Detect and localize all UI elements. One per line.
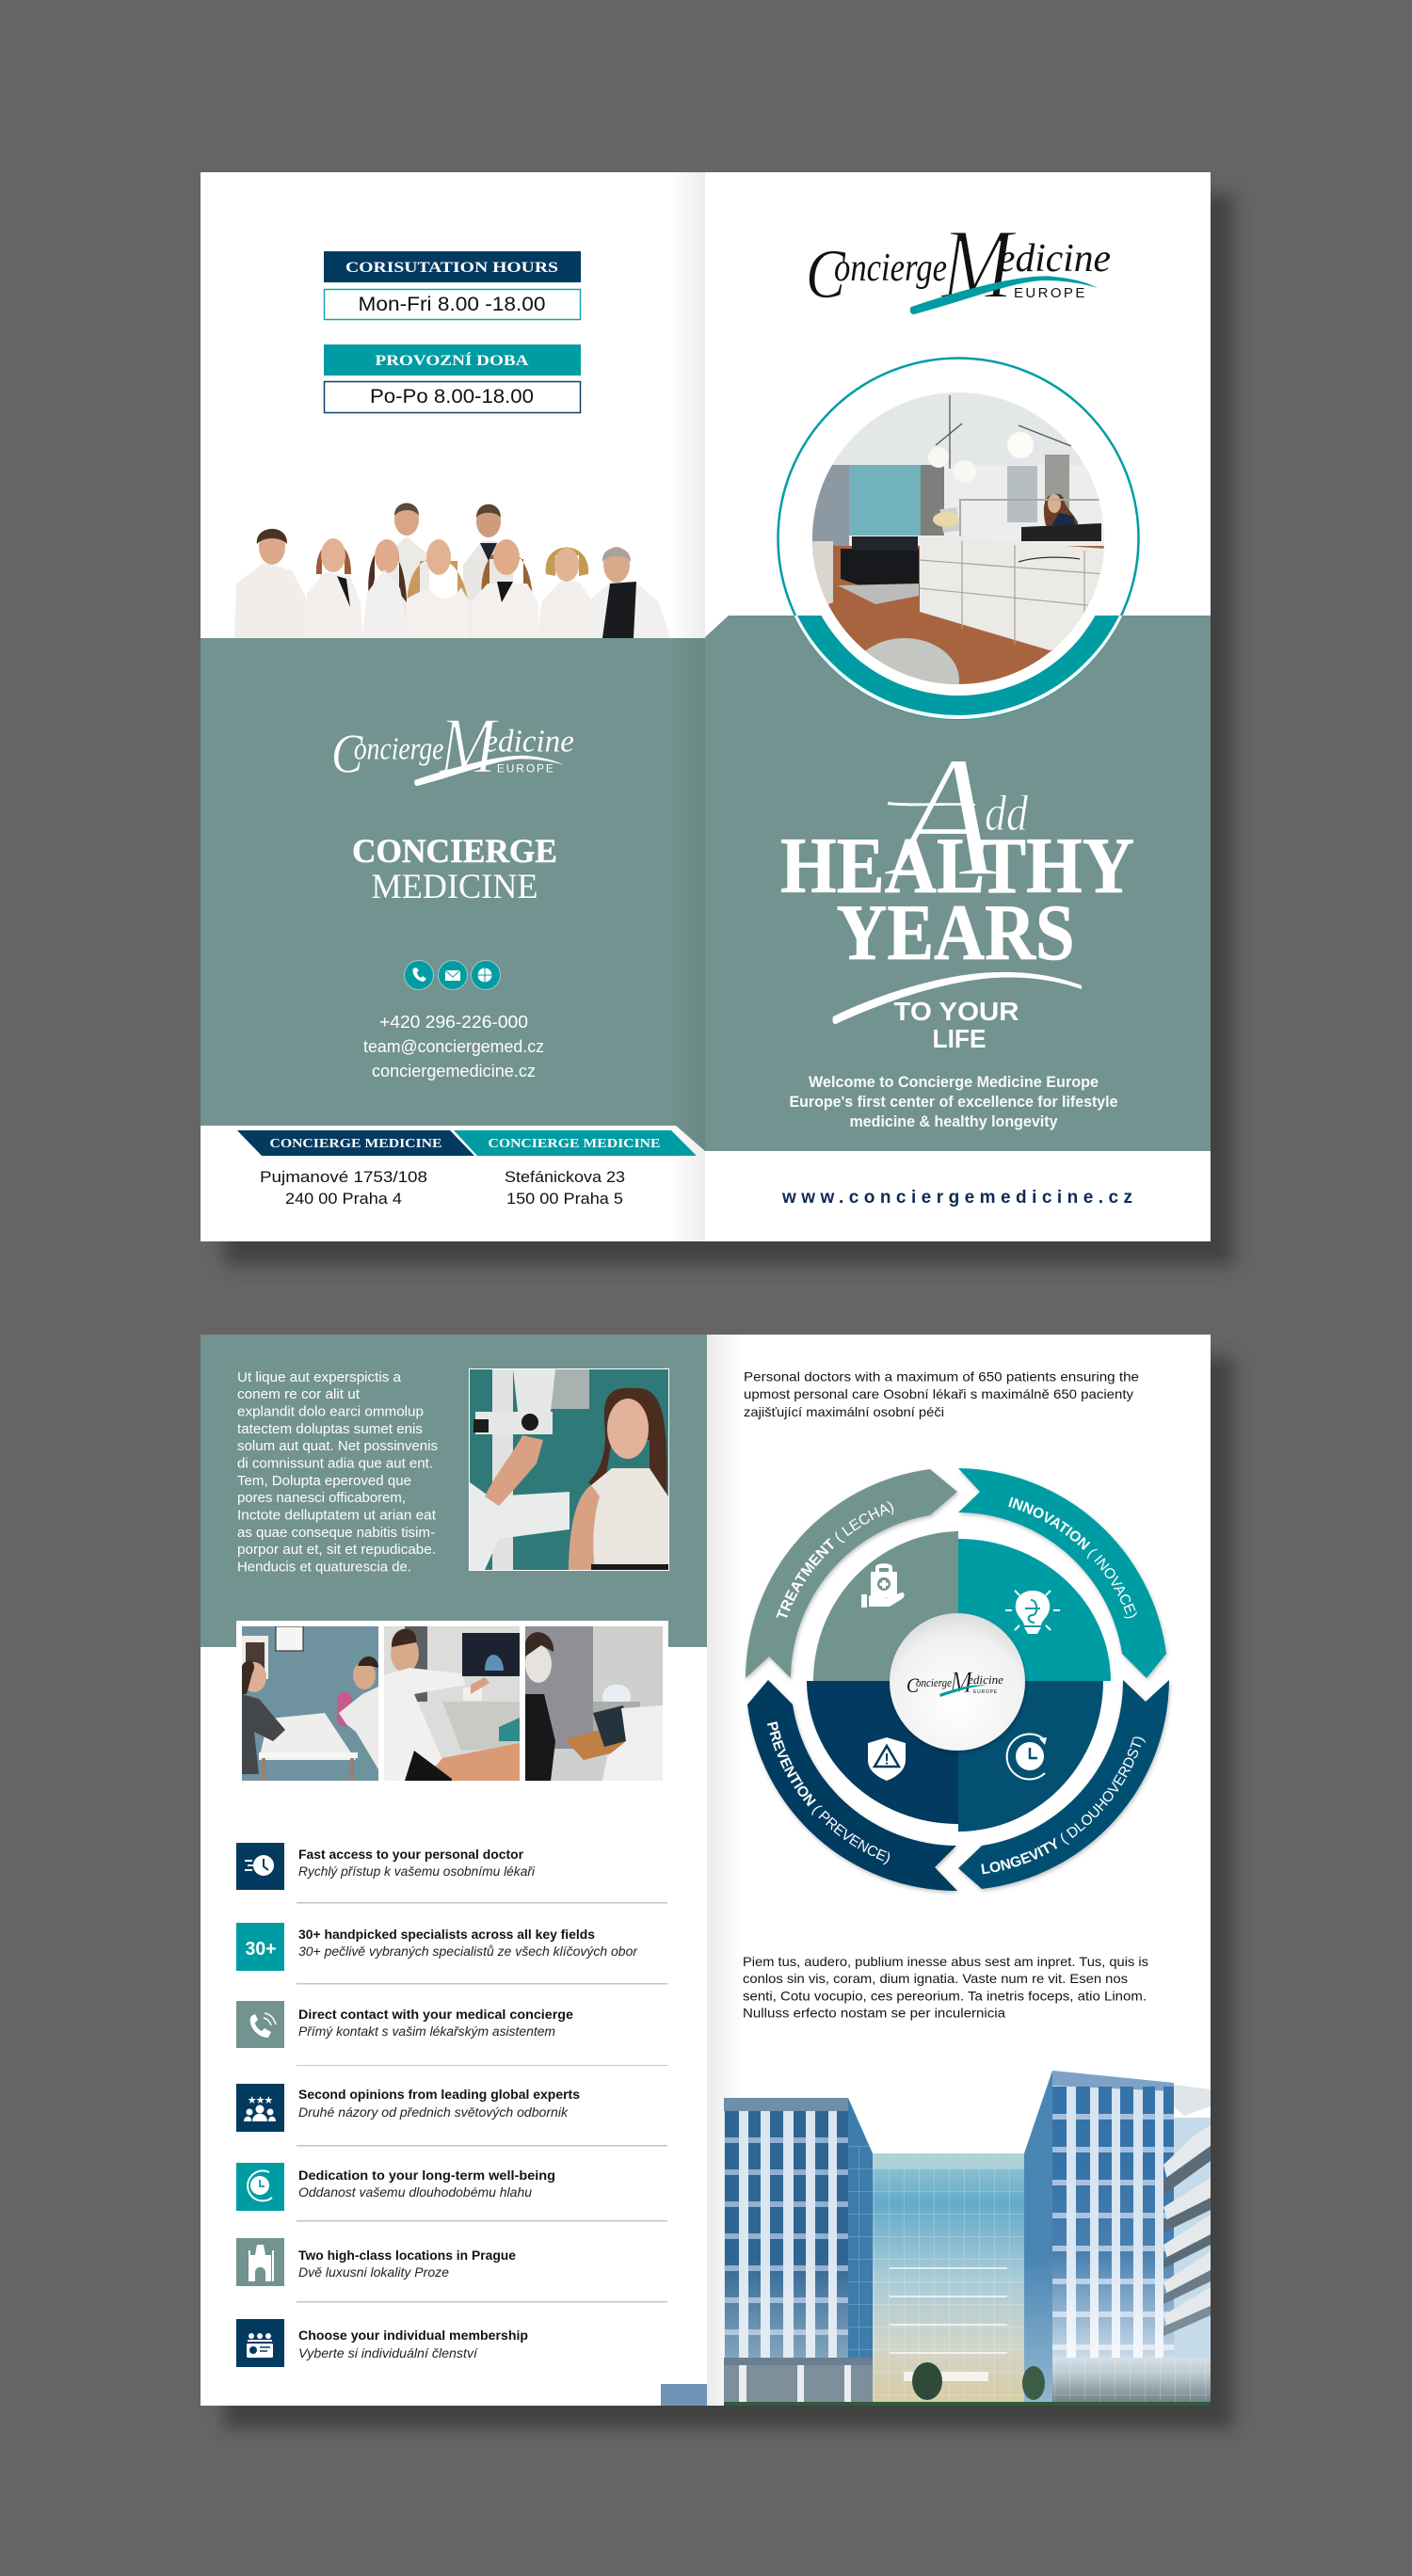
center disc with logo: EUROPE	[973, 1689, 998, 1695]
logo: white on teal: M	[439, 703, 500, 791]
consultation hours value: Mon-Fri 8.00 -18.00	[358, 294, 546, 315]
arrow: longevity: LONGEVITY ( DLOUHOVERDST)	[981, 1737, 1146, 1875]
personal doctors paragraph	[744, 1368, 1139, 1419]
benefit: second opinions: ★★★	[248, 2095, 273, 2106]
intro paragraph: porpor aut et, sit et repudicabe.	[237, 1542, 436, 1558]
personal doctors paragraph: zajišťující maximální osobní péči	[744, 1404, 944, 1419]
lower paragraph: Piem tus, audero, publium inesse abus sest am inpret. Tus, quis is	[743, 1954, 1148, 1969]
heading: concierge medicine: MEDICINE	[371, 868, 538, 906]
intro paragraph: tatectem doluptas sumet enis	[237, 1421, 423, 1437]
intro paragraph	[237, 1369, 438, 1576]
benefit: locations	[236, 2238, 516, 2286]
benefit: fast access: Fast access to your personal doctor	[298, 1848, 524, 1862]
welcome text	[789, 1073, 1118, 1130]
logo: dark on white: EUROPE	[1014, 285, 1087, 301]
logo: dark on white: C	[806, 236, 846, 313]
logo: dark on white	[806, 209, 1111, 319]
address: Pujmanove	[260, 1168, 427, 1208]
photo strip	[236, 1621, 669, 1786]
logo: white on teal: C	[331, 724, 363, 785]
contact details: +420 296-226-000	[379, 1013, 528, 1032]
contact details: team@conciergemed.cz	[363, 1037, 544, 1056]
center disc with logo	[890, 1613, 1025, 1751]
benefit: direct contact: Přímý kontakt s vašim lékařským asistentem	[298, 2024, 555, 2039]
contact details: conciergemedicine.cz	[372, 1062, 536, 1080]
icon: clock with arrow	[1007, 1734, 1047, 1779]
logo: white on teal: oncierge	[354, 731, 444, 766]
address ribbon: first location	[237, 1130, 474, 1156]
center disc with logo: M	[949, 1666, 973, 1700]
panel: top brochure back page	[201, 172, 705, 1241]
benefit: locations: Dvě luxusni lokality Proze	[298, 2265, 449, 2280]
intro paragraph: conem re cor alit ut	[237, 1386, 361, 1402]
script word Add: A	[882, 720, 999, 914]
benefit: dedication: Oddanost vašemu dlouhodobému hlahu	[298, 2185, 533, 2200]
icon: medical kit in hand	[861, 1563, 905, 1608]
arrow: treatment: TREATMENT ( LECHA)	[776, 1501, 894, 1618]
quadrant: treatment	[813, 1531, 958, 1681]
center disc with logo: oncierge	[916, 1675, 952, 1689]
arrow: prevention: PREVENTION ( PREVENCE)	[767, 1721, 891, 1865]
benefit: fast access	[236, 1843, 536, 1890]
HEALTHY: HEALTHY	[780, 822, 1134, 910]
benefit: direct contact: Direct contact with your medical concierge	[298, 2008, 574, 2022]
benefit: membership: Vyberte si individuální členství	[298, 2346, 478, 2360]
to your life	[894, 997, 1019, 1053]
icon: globe	[471, 960, 501, 990]
welcome text: medicine & healthy longevity	[849, 1112, 1058, 1130]
benefit: membership: Choose your individual membership	[298, 2328, 528, 2343]
center disc with logo: edicine	[968, 1672, 1003, 1687]
personal doctors paragraph: Personal doctors with a maximum of 650 patients ensuring the	[744, 1368, 1139, 1384]
icon: envelope	[439, 960, 467, 990]
arrow: innovation: INNOVATION ( INOVACE)	[1008, 1496, 1137, 1619]
heading: concierge medicine	[352, 832, 557, 906]
welcome text: Europe's first center of excellence for lifestyle	[789, 1093, 1118, 1111]
photo: consultation	[242, 1626, 378, 1781]
address ribbon: second location	[454, 1130, 697, 1156]
address: Stefanickova: Stefánickova 23	[505, 1168, 625, 1186]
benefit: specialists: 30+ pečlivě vybraných specialistů ze všech klíčových obor	[298, 1944, 638, 1959]
team photo	[234, 503, 670, 638]
intro paragraph: di comnissunt adia que aut ent.	[237, 1455, 433, 1472]
benefit: specialists: 30+	[245, 1939, 277, 1960]
website url: www.conciergemedicine.cz	[781, 1188, 1132, 1208]
logo: white on teal	[331, 703, 574, 791]
photo: eye diagnostics	[525, 1626, 663, 1781]
photo: office building	[724, 2071, 1211, 2406]
logo: dark on white: oncierge	[834, 247, 947, 290]
address: Pujmanove: 240 00 Praha 4	[285, 1190, 402, 1208]
cover title: add healthy years	[780, 720, 1134, 1053]
icon: light bulb	[1005, 1591, 1060, 1634]
arrow: prevention	[746, 1680, 958, 1895]
intro paragraph: solum aut quat. Net possinvenis	[237, 1438, 438, 1454]
benefit: dedication: Dedication to your long-term well-being	[298, 2168, 555, 2183]
provozni doba value	[324, 382, 580, 412]
benefit: second opinions: Druhé názory od přednich světových odbornik	[298, 2105, 569, 2120]
benefit: locations: Two high-class locations in Prague	[298, 2248, 516, 2263]
left wing	[724, 2098, 873, 2402]
panel: top brochure cover page	[705, 172, 1211, 1241]
arrow: longevity	[958, 1680, 1172, 1893]
script word Add: dd	[985, 785, 1029, 841]
atrium	[871, 2153, 1026, 2402]
address: Stefanickova: 150 00 Praha 5	[506, 1190, 623, 1208]
arrow: innovation	[958, 1468, 1169, 1681]
intro paragraph: Henducis et quaturescia de.	[237, 1559, 411, 1576]
contact icons	[405, 960, 501, 990]
quadrant: prevention	[807, 1681, 958, 1824]
trees and lawn	[724, 2362, 1211, 2406]
personal doctors paragraph: upmost personal care Osobní lékaři s maximálně 650 pacienty	[744, 1386, 1133, 1401]
benefit: direct contact	[236, 2001, 574, 2048]
swoosh	[832, 972, 1082, 1024]
lower paragraph: senti, Cotu vocupio, ces pereorium. Ta inetris foceps, atio Linom.	[743, 1988, 1147, 2003]
address ribbon: first location: CONCIERGE MEDICINE	[269, 1137, 442, 1151]
panel: bottom brochure right page	[707, 1335, 1211, 2406]
address: Stefanickova	[505, 1168, 625, 1208]
benefit: specialists	[236, 1923, 638, 1971]
intro paragraph: Inctote delluptatem ut arian eat	[237, 1508, 437, 1523]
address: Pujmanove: Pujmanové 1753/108	[260, 1168, 427, 1186]
logo: white on teal: EUROPE	[497, 762, 555, 776]
provozni doba heading	[324, 344, 581, 376]
welcome text: Welcome to Concierge Medicine Europe	[809, 1073, 1099, 1091]
lower paragraph: Nulluss erfecto nostam se per inculernicia	[743, 2005, 1005, 2020]
heading: concierge medicine: CONCIERGE	[352, 832, 557, 870]
circle frame with teal band	[778, 358, 1139, 719]
benefit: specialists: 30+ handpicked specialists across all key fields	[298, 1928, 595, 1942]
intro paragraph: as quae conseque nabitis tisim-	[237, 1525, 435, 1541]
intro paragraph: pores nanesci officaborem,	[237, 1490, 406, 1506]
icon: phone	[405, 960, 433, 990]
icon: warning shield	[868, 1737, 906, 1781]
balconies	[1163, 2085, 1211, 2358]
benefit: membership	[236, 2319, 528, 2367]
benefit: second opinions	[236, 2084, 580, 2132]
cycle diagram	[744, 1468, 1172, 1895]
contact details	[363, 1013, 544, 1080]
to your life: LIFE	[932, 1024, 987, 1053]
provozni doba value: Po-Po 8.00-18.00	[370, 386, 534, 408]
benefit: second opinions: Second opinions from leading global experts	[298, 2088, 580, 2102]
center disc with logo: C	[907, 1673, 919, 1697]
logo: dark on white: M	[939, 209, 1018, 319]
right wing	[1024, 2071, 1211, 2402]
quadrant: longevity	[958, 1681, 1103, 1832]
photo: eye exam	[469, 1368, 669, 1571]
lower paragraph	[743, 1954, 1148, 2020]
arrow: treatment	[744, 1469, 959, 1680]
logo: white on teal: edicine	[484, 724, 574, 759]
provozni doba heading: PROVOZNÍ DOBA	[375, 351, 529, 369]
to your life: TO YOUR	[894, 997, 1019, 1026]
consultation hours heading	[324, 251, 581, 282]
lower paragraph: conlos sin vis, coram, dium ignatia. Vaste num re vit. Esen nos	[743, 1971, 1128, 1986]
intro paragraph: explandit dolo earci ommolup	[237, 1404, 424, 1419]
consultation hours value	[324, 290, 580, 320]
logo: dark on white: edicine	[998, 237, 1111, 280]
intro paragraph: Ut lique aut experspictis a	[237, 1369, 402, 1385]
panel: bottom brochure left page	[201, 1335, 707, 2406]
quadrant: innovation	[958, 1539, 1111, 1681]
benefits list	[236, 1843, 667, 2367]
consultation hours heading: CORISUTATION HOURS	[345, 260, 558, 276]
photo: ultrasound	[384, 1626, 520, 1781]
YEARS: YEARS	[836, 888, 1075, 977]
photo: clinic reception	[812, 392, 1104, 684]
intro paragraph: Tem, Dolupta eperoved que	[237, 1473, 411, 1489]
benefit: fast access: Rychlý přístup k vašemu osobnímu lékaři	[298, 1864, 536, 1879]
benefit: dedication	[236, 2163, 555, 2211]
address ribbon: second location: CONCIERGE MEDICINE	[488, 1137, 661, 1151]
